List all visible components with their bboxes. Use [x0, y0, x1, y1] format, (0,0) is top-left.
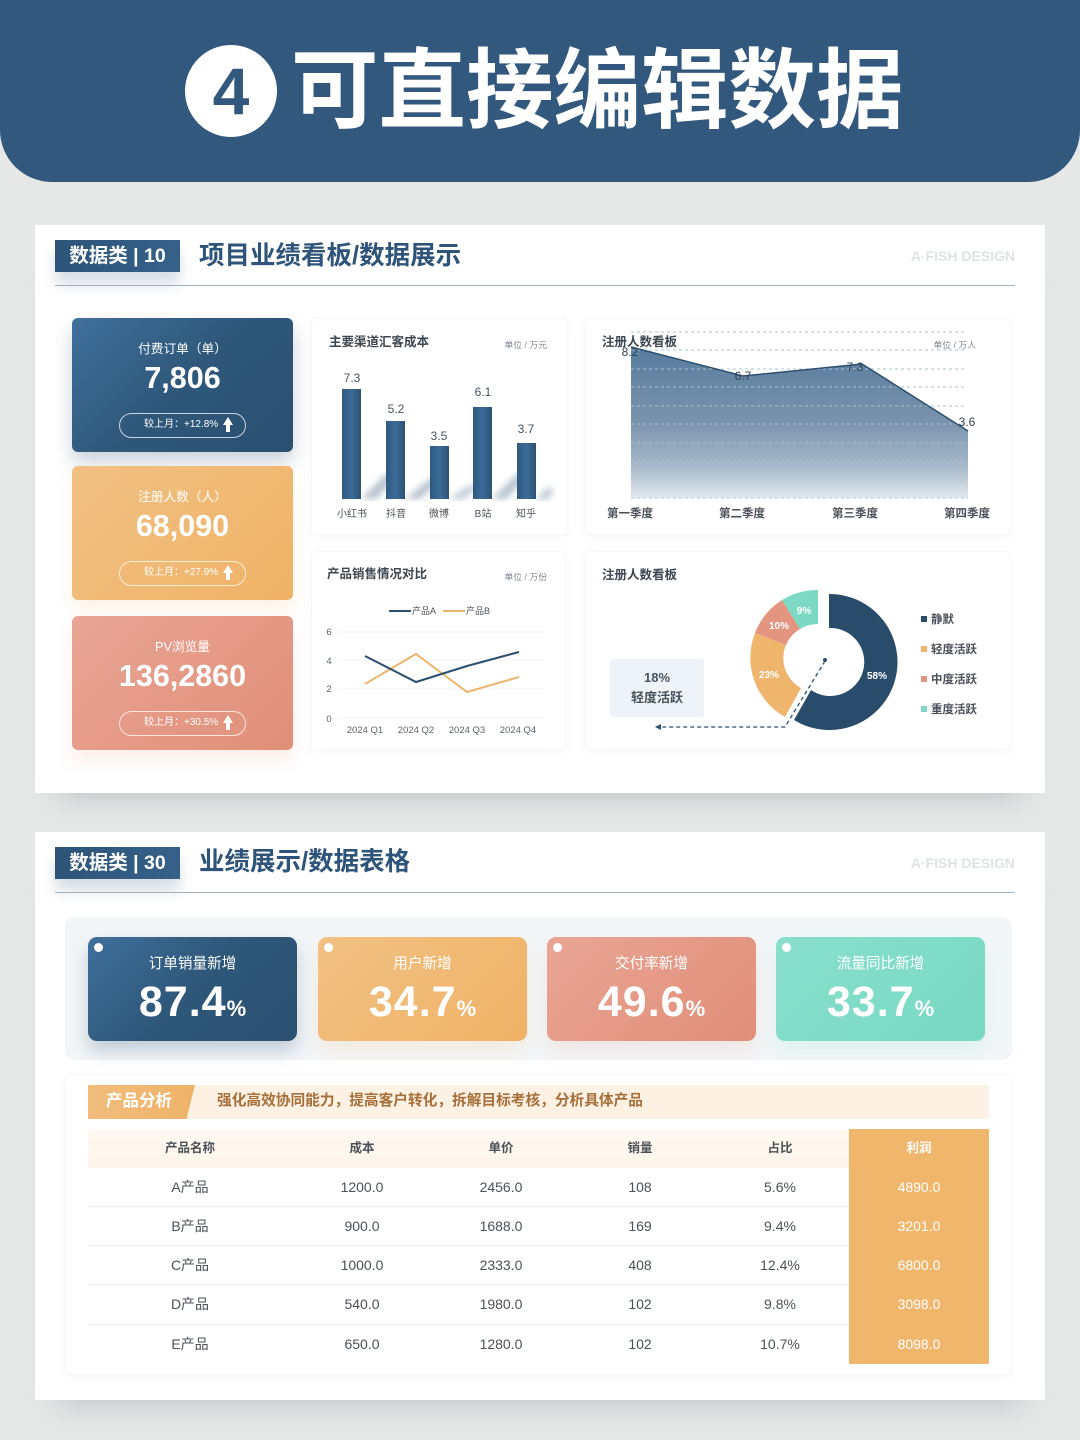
label: PV浏览量	[155, 640, 210, 654]
KPI card: page views	[72, 616, 293, 750]
area chart: registered users: 8.2	[622, 345, 639, 359]
banner label	[88, 1085, 195, 1119]
row E: 102	[628, 1336, 652, 1352]
row A: A产品	[171, 1179, 209, 1195]
main title: 可直接编辑数据	[291, 42, 904, 140]
change pill	[119, 413, 246, 438]
stat card: delivery	[547, 937, 756, 1041]
brand mark: A·FISH DESIGN	[911, 248, 1015, 264]
area chart: registered users: 第一季度	[607, 506, 653, 520]
row D: 1980.0	[480, 1296, 522, 1312]
line chart: product sales: 6	[326, 627, 332, 638]
tag: 数据类 30: 数据类 | 30	[69, 852, 166, 874]
line chart: product sales: 2024 Q1	[347, 725, 383, 736]
legend: 静默	[931, 612, 954, 626]
area chart: registered users: 7.3	[847, 360, 864, 374]
row A: 1200.0	[341, 1179, 383, 1195]
row E: 1280.0	[480, 1336, 522, 1352]
row D: 102	[628, 1296, 652, 1312]
value: 7,806	[144, 361, 221, 395]
unit label: 单位 / 万份	[504, 571, 547, 582]
segment: 58%	[794, 594, 897, 730]
header row: 成本	[349, 1141, 374, 1155]
line chart: product sales: 2024 Q4	[500, 725, 536, 736]
line chart: product sales	[326, 566, 547, 736]
row B: 900.0	[344, 1218, 380, 1234]
line chart: product sales: 4	[326, 656, 332, 667]
panel: channel cost card	[311, 318, 568, 535]
value: 68,090	[136, 509, 229, 543]
unit label: 单位 / 万人	[933, 339, 976, 350]
bar chart: channel cost: 抖音	[386, 507, 406, 520]
chart title: 注册人数看板	[602, 567, 678, 582]
donut chart: activity: 9%	[797, 606, 811, 617]
row D: 3098.0	[898, 1296, 940, 1312]
value: 136,2860	[119, 659, 246, 693]
callout: 18% light activity	[610, 659, 704, 717]
brand mark: A·FISH DESIGN	[911, 855, 1015, 871]
row C: 408	[628, 1257, 652, 1273]
profit column	[849, 1129, 989, 1364]
row B: 1688.0	[480, 1218, 522, 1234]
bar chart: channel cost: B站	[475, 507, 491, 520]
panel: registered users area card	[585, 318, 1011, 535]
stat strip background	[65, 917, 1012, 1060]
area chart: registered users: 6.7	[735, 369, 752, 383]
number badge 4	[185, 45, 277, 137]
area chart: registered users: 3.6	[959, 415, 976, 429]
donut chart: activity	[602, 567, 977, 730]
panel: project dashboard	[35, 225, 1045, 793]
row D: 540.0	[344, 1296, 380, 1312]
value: 33.7%	[827, 978, 934, 1026]
tag: 数据类 10: 数据类 | 10	[69, 245, 166, 267]
row A: 4890.0	[898, 1179, 940, 1195]
bar chart: channel cost: 7.3	[344, 371, 361, 385]
legend: 轻度活跃	[931, 642, 977, 656]
donut chart: activity: 10%	[769, 621, 789, 632]
row C: C产品	[171, 1257, 209, 1273]
heading: performance table: 业绩展示/数据表格	[199, 848, 410, 876]
change pill	[119, 711, 246, 736]
area chart: registered users: 第四季度	[944, 506, 990, 520]
number badge 4: 4	[213, 54, 249, 128]
header row	[165, 1141, 932, 1155]
label: 用户新增	[393, 956, 452, 972]
legend: 重度活跃	[931, 702, 977, 716]
tag: 数据类 10	[55, 240, 180, 272]
bar chart: channel cost: 6.1	[475, 385, 492, 399]
line chart: product sales: 2024 Q3	[449, 725, 485, 736]
bar chart: channel cost: 知乎	[516, 507, 536, 520]
KPI card: paid orders	[72, 318, 293, 452]
row D: 9.8%	[764, 1296, 796, 1312]
panel: performance table	[35, 832, 1045, 1400]
table header band	[88, 1129, 849, 1168]
row A	[171, 1179, 940, 1195]
header row: 产品名称	[165, 1141, 215, 1155]
row D	[171, 1296, 940, 1312]
area fill	[631, 347, 968, 498]
callout: 18% light activity: 轻度活跃	[631, 690, 683, 705]
change pill: 较上月：+12.8%	[144, 419, 218, 430]
bar chart: channel cost: 小红书	[337, 507, 367, 520]
bar chart: channel cost: 3.5	[431, 429, 448, 443]
panel: donut card	[585, 551, 1011, 750]
row E	[171, 1336, 940, 1352]
row B: 3201.0	[898, 1218, 940, 1234]
label: 付费订单（单）	[138, 342, 227, 356]
stat card: traffic	[776, 937, 985, 1041]
label: 注册人数（人）	[138, 490, 227, 504]
value: 49.6%	[598, 978, 705, 1026]
row D: D产品	[171, 1296, 209, 1312]
value: 34.7%	[369, 978, 476, 1026]
row E: 8098.0	[898, 1336, 940, 1352]
row A: 108	[628, 1179, 652, 1195]
row E: 10.7%	[760, 1336, 800, 1352]
label: 交付率新增	[615, 956, 688, 972]
row E: E产品	[171, 1336, 209, 1352]
area chart: registered users: 第二季度	[719, 506, 765, 520]
row E: 650.0	[344, 1336, 380, 1352]
header banner	[0, 0, 1080, 182]
tag: 数据类 30	[55, 847, 180, 879]
legend	[921, 612, 977, 716]
legend	[389, 605, 490, 616]
bar chart: channel cost: 5.2	[388, 402, 405, 416]
change pill: 较上月：+27.9%	[144, 567, 218, 578]
row A: 5.6%	[764, 1179, 796, 1195]
banner: product analysis	[88, 1085, 989, 1119]
chart title: 产品销售情况对比	[327, 566, 427, 581]
line chart: product sales: 2024 Q2	[398, 725, 434, 736]
header row: 利润	[906, 1141, 932, 1155]
banner label: 产品分析	[106, 1092, 172, 1110]
area chart: registered users	[602, 332, 990, 520]
banner text: 强化高效协同能力，提高客户转化，拆解目标考核，分析具体产品	[217, 1093, 643, 1109]
row C: 1000.0	[341, 1257, 383, 1273]
bar chart: channel cost: 3.7	[518, 422, 535, 436]
row A: 2456.0	[480, 1179, 522, 1195]
segment: 10%	[755, 600, 800, 645]
header row: 占比	[767, 1141, 792, 1155]
row B: 169	[628, 1218, 652, 1234]
legend: 产品A	[412, 605, 436, 616]
unit label: 单位 / 万元	[504, 339, 547, 350]
row B	[171, 1218, 940, 1234]
segment: 9%	[782, 590, 818, 629]
panel: product sales card	[311, 551, 566, 750]
bar chart: channel cost	[329, 334, 553, 520]
row C: 2333.0	[480, 1257, 522, 1273]
row B: B产品	[171, 1218, 209, 1234]
bar chart: channel cost: 微博	[429, 507, 449, 520]
row C: 12.4%	[760, 1257, 800, 1273]
change pill	[119, 561, 246, 586]
label: 流量同比新增	[837, 956, 924, 972]
label: 订单销量新增	[149, 956, 236, 972]
legend: 中度活跃	[931, 672, 977, 686]
donut chart: activity: 23%	[759, 670, 779, 681]
KPI card: registered users	[72, 466, 293, 600]
callout: 18% light activity: 18%	[644, 670, 670, 685]
chart title: 主要渠道汇客成本	[329, 334, 430, 349]
row C: 6800.0	[898, 1257, 940, 1273]
callout leader line	[660, 661, 825, 727]
line chart: product sales: 0	[326, 714, 332, 725]
change pill: 较上月：+30.5%	[144, 717, 218, 728]
value: 87.4%	[139, 978, 246, 1026]
row C	[171, 1257, 940, 1273]
header row: 单价	[488, 1141, 514, 1155]
legend: 产品B	[466, 605, 490, 616]
donut chart: activity: 58%	[867, 671, 887, 682]
segment: 23%	[750, 633, 801, 717]
line chart: product sales: 2	[326, 684, 332, 695]
heading: project dashboard: 项目业绩看板/数据展示	[199, 242, 461, 270]
area chart: registered users: 第三季度	[832, 506, 878, 520]
table card outline	[65, 1074, 1012, 1375]
stat card: orders	[88, 937, 297, 1041]
header row: 销量	[627, 1141, 652, 1155]
stat card: users	[318, 937, 527, 1041]
chart title: 注册人数看板	[602, 334, 678, 349]
row B: 9.4%	[764, 1218, 796, 1234]
